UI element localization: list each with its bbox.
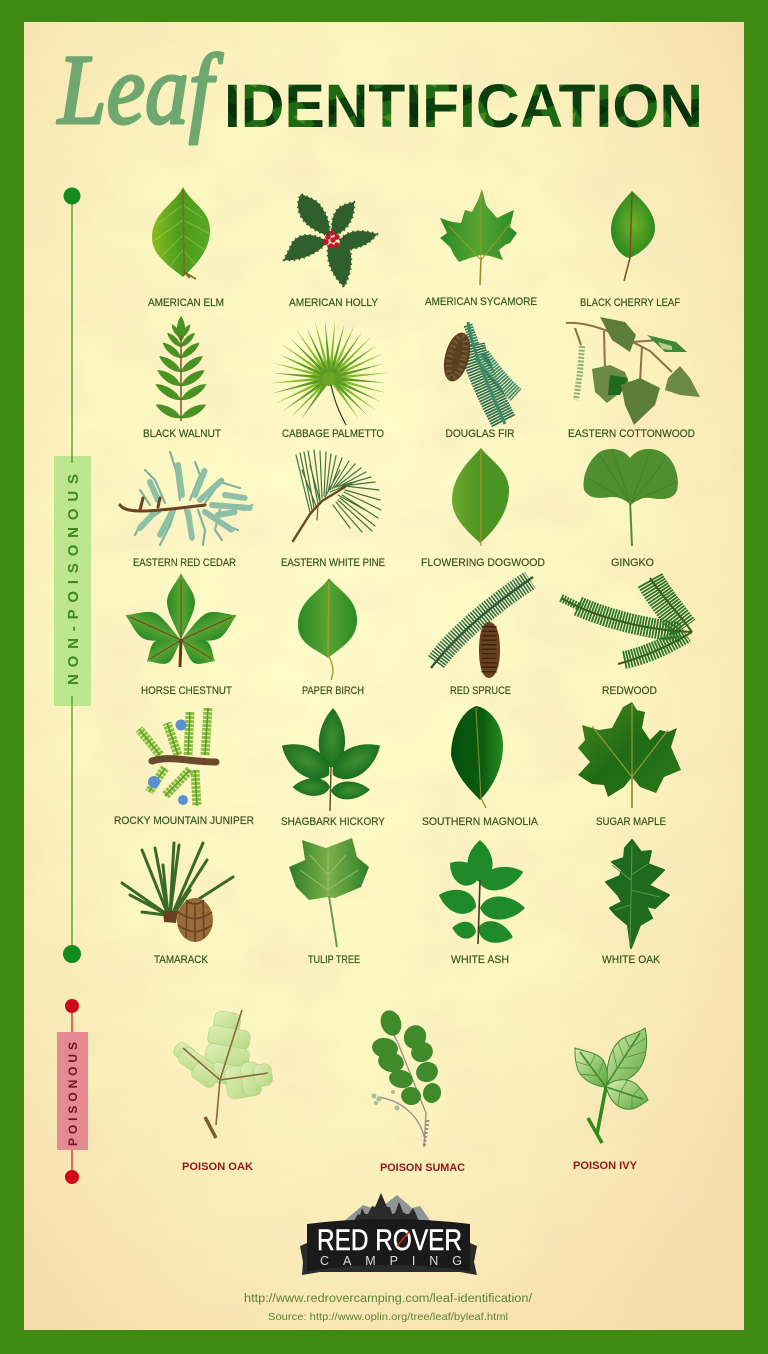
- specimen: Poison Ivy: [573, 1028, 648, 1172]
- logo: Red Rover Camping: [300, 1193, 477, 1275]
- label: SOUTHERN MAGNOLIA: [422, 816, 539, 828]
- specimen: Gingko: [584, 449, 678, 569]
- specimen: Black Cherry Leaf: [580, 191, 680, 309]
- specimen: American Sycamore: [425, 189, 537, 308]
- title script word: Leaf: [56, 34, 224, 145]
- specimen: Douglas Fir: [439, 322, 516, 440]
- label: EASTERN RED CEDAR: [133, 557, 236, 569]
- label: SUGAR MAPLE: [596, 816, 666, 828]
- label: HORSE CHESTNUT: [141, 685, 232, 697]
- label: FLOWERING DOGWOOD: [421, 557, 545, 569]
- label: POISON IVY: [573, 1160, 638, 1172]
- label: GINGKO: [611, 557, 654, 569]
- label: SHAGBARK HICKORY: [281, 816, 386, 828]
- specimen: Cabbage Palmetto: [270, 319, 389, 440]
- specimen: Southern Magnolia: [422, 706, 539, 828]
- label: EASTERN WHITE PINE: [281, 557, 385, 569]
- label: AMERICAN HOLLY: [289, 297, 379, 309]
- label: AMERICAN ELM: [148, 297, 224, 309]
- label: AMERICAN SYCAMORE: [425, 296, 537, 308]
- title main word: IDENTIFICATION: [224, 72, 703, 140]
- logo wordmark: RED ROVER: [317, 1224, 462, 1257]
- non-poisonous timeline: [54, 188, 91, 963]
- specimen: Poison Sumac: [370, 1007, 465, 1174]
- specimen: Flowering Dogwood: [421, 448, 545, 569]
- label: DOUGLAS FIR: [446, 428, 515, 440]
- label: EASTERN COTTONWOOD: [568, 428, 695, 440]
- label: TULIP TREE: [308, 954, 360, 966]
- specimen: White Ash: [435, 840, 526, 966]
- label: POISON SUMAC: [380, 1162, 465, 1174]
- specimen: Eastern White Pine: [281, 450, 385, 569]
- title: [56, 34, 703, 145]
- specimen: American Holly: [284, 194, 379, 309]
- label: ROCKY MOUNTAIN JUNIPER: [114, 815, 254, 827]
- logo main banner: [307, 1219, 470, 1271]
- label: WHITE ASH: [451, 954, 509, 966]
- label: TAMARACK: [154, 954, 209, 966]
- logo compass needle: [397, 1232, 409, 1246]
- specimen: Poison Oak: [171, 1010, 273, 1173]
- specimen: Horse Chestnut: [120, 573, 242, 697]
- specimen: American Elm: [148, 187, 224, 309]
- poisonous label: POISONOUS: [66, 1042, 80, 1146]
- footer source: Source: http://www.oplin.org/tree/leaf/byleaf.html: [268, 1311, 508, 1323]
- specimen: Paper Birch: [298, 578, 364, 697]
- specimen: Sugar Maple: [578, 702, 681, 828]
- non-poisonous label: NON-POISONOUS: [65, 474, 82, 685]
- specimen: Eastern Cottonwood: [566, 317, 700, 440]
- specimen: Redwood: [561, 578, 692, 697]
- specimen: Black Walnut: [143, 316, 221, 440]
- footer url: http://www.redrovercamping.com/leaf-identification/: [244, 1293, 533, 1305]
- specimen: Shagbark Hickory: [274, 708, 388, 828]
- specimen: White Oak: [602, 840, 669, 966]
- label: WHITE OAK: [602, 954, 661, 966]
- specimen: Tamarack: [122, 843, 233, 966]
- label: REDWOOD: [602, 685, 657, 697]
- specimen: Eastern Red Cedar: [120, 452, 252, 569]
- logo mountains: [343, 1193, 431, 1224]
- label: CABBAGE PALMETTO: [282, 428, 384, 440]
- label: RED SPRUCE: [450, 685, 511, 697]
- label: BLACK WALNUT: [143, 428, 221, 440]
- specimen: Rocky Mountain Juniper: [114, 708, 254, 827]
- label: BLACK CHERRY LEAF: [580, 297, 680, 309]
- specimen: Tulip Tree: [289, 838, 369, 966]
- specimen: Red Spruce: [431, 577, 533, 697]
- logo banner: [300, 1243, 477, 1275]
- label: PAPER BIRCH: [302, 685, 364, 697]
- poisonous timeline: [57, 999, 88, 1184]
- logo subtitle: CAMPING: [320, 1254, 462, 1268]
- label: POISON OAK: [182, 1161, 253, 1173]
